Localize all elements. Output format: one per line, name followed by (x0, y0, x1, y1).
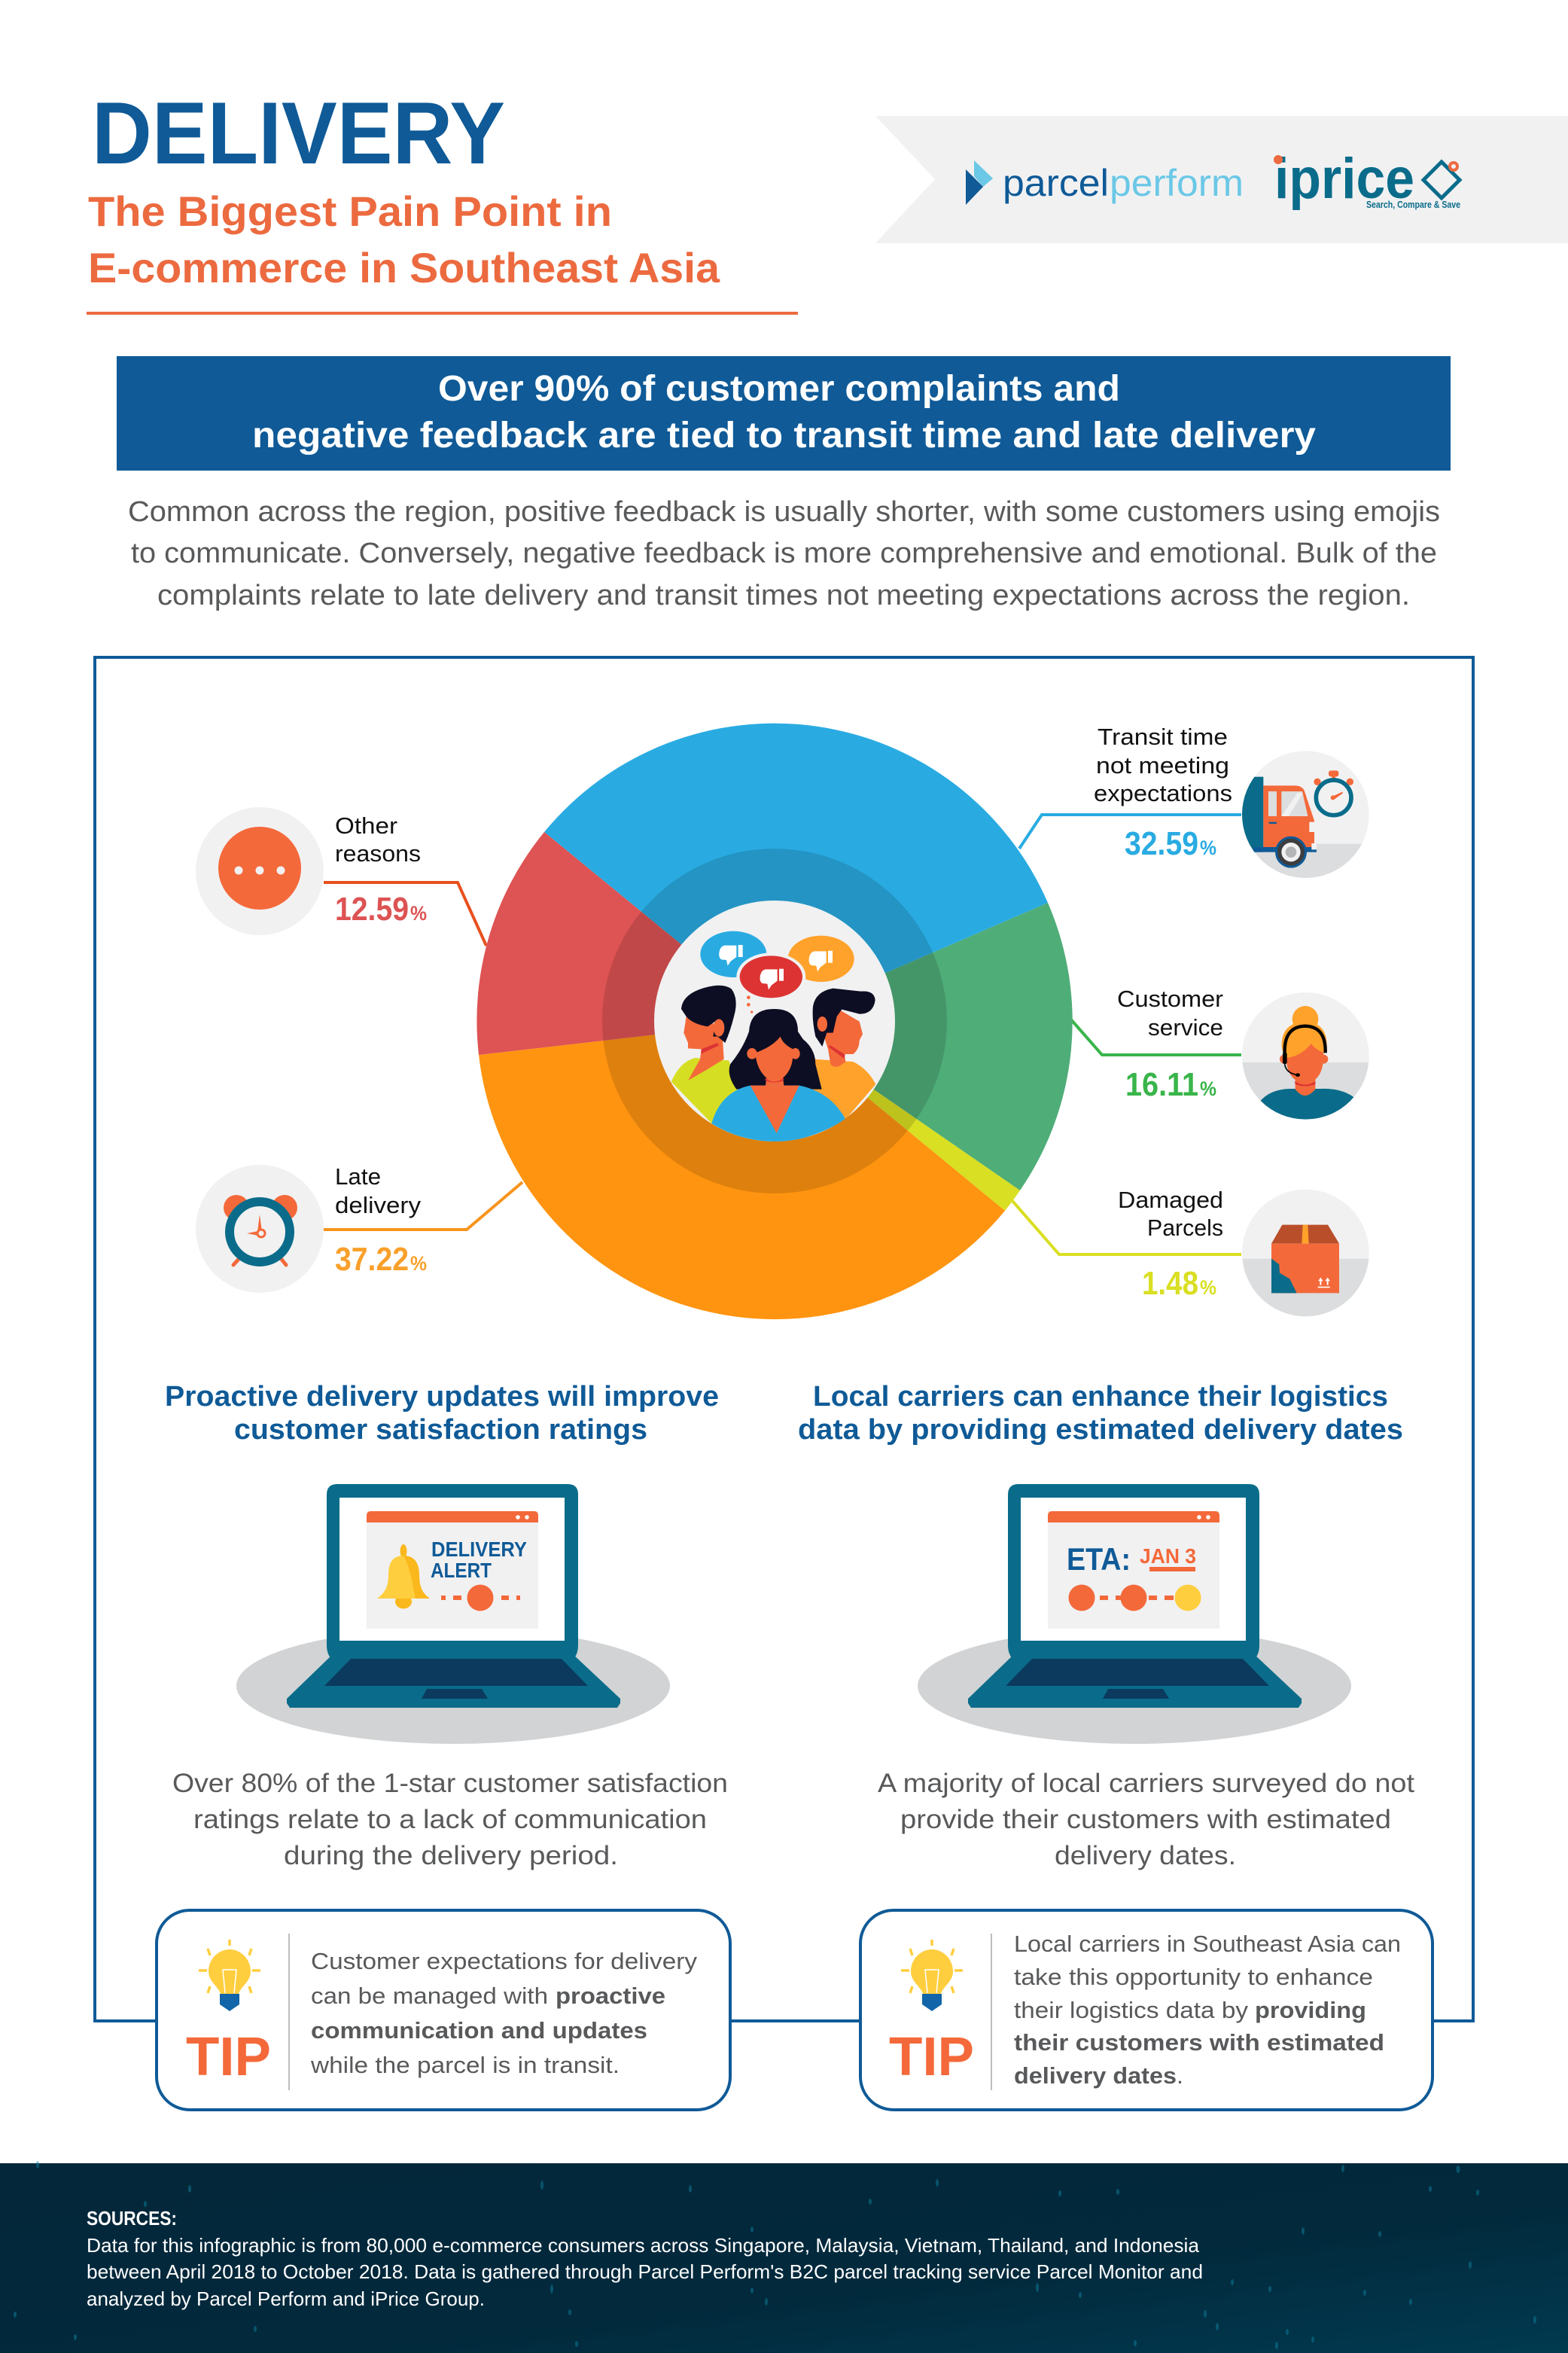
sources text: Data for this infographic is from 80,000 e-commerce consumers across Singapore, Malaysia, Vietnam, Thailand, and Indonesia (87, 2234, 1200, 2257)
laptop: ETA: ETA: (1067, 1541, 1131, 1577)
tip text: communication and updates (311, 2017, 647, 2044)
logo: iprice: Search, Compare & Save (1366, 199, 1460, 210)
tip text (310, 1948, 698, 2078)
left body text (172, 1769, 728, 1870)
logo: iprice: iprice (1274, 147, 1414, 211)
laptop: ETA: JAN 3 (1140, 1544, 1196, 1568)
tip panel left: TIP (186, 2027, 271, 2087)
subtitle line 1: The Biggest Pain Point in (88, 187, 612, 235)
tip panel left (157, 1910, 730, 2110)
callout: late delivery: delivery (335, 1192, 422, 1218)
callout: customer service: service (1148, 1014, 1223, 1041)
callout: customer service (1119, 991, 1369, 1120)
right column heading: Local carriers can enhance their logistics (813, 1381, 1388, 1413)
left column heading: Proactive delivery updates will improve (165, 1381, 719, 1413)
right body text (878, 1769, 1414, 1870)
right person (813, 989, 875, 1120)
center person (711, 1009, 845, 1142)
tip text: providing (1255, 1997, 1366, 2023)
icon: damaged box (1242, 1190, 1369, 1316)
browser window (367, 1511, 538, 1629)
icon: unhappy customers (671, 931, 875, 1142)
icon: light bulb (901, 1940, 963, 2011)
callout: transit time (1095, 728, 1369, 878)
callout: late delivery: % (410, 1252, 427, 1275)
headline banner: Over 90% of customer complaints and (438, 369, 1120, 409)
tip panel right (860, 1910, 1433, 2110)
tip text: Customer expectations for delivery (311, 1948, 698, 1974)
callout: other reasons: 12.59 (335, 891, 409, 928)
callout connector lines (324, 815, 1241, 1254)
headline banner: negative feedback are tied to transit time and late delivery (252, 416, 1316, 456)
intro paragraph (128, 496, 1440, 611)
sources text: analyzed by Parcel Perform and iPrice Group. (87, 2287, 485, 2310)
laptop: ETA (918, 1484, 1351, 1744)
callout: transit time: Transit time (1098, 724, 1228, 750)
slice: transit time (544, 724, 1048, 1021)
right body text: A majority of local carriers surveyed do not (878, 1769, 1414, 1798)
footer (0, 2161, 1568, 2353)
tip text: can be managed with (311, 1983, 548, 2009)
callout: late delivery (196, 1163, 427, 1293)
slice: other reasons (476, 832, 775, 1055)
icon: parcelperform arrow (966, 160, 993, 205)
tip text: take this opportunity to enhance (1014, 1964, 1373, 1990)
left body text: ratings relate to a lack of communication (193, 1805, 707, 1834)
icon: light bulb (199, 1940, 260, 2011)
right column heading: data by providing estimated delivery dates (798, 1414, 1403, 1446)
icon: alarm clock (224, 1195, 297, 1265)
callout: transit time: 32.59 (1125, 825, 1198, 862)
callout: customer service: 16.11 (1125, 1066, 1198, 1103)
callout: transit time: not meeting (1096, 752, 1229, 779)
callout: customer service: % (1200, 1077, 1216, 1100)
callout: other reasons (196, 807, 427, 935)
title underline (87, 312, 798, 315)
progress indicator (1069, 1584, 1201, 1611)
icon: support agent (1242, 992, 1369, 1120)
left person (671, 986, 738, 1124)
tip text: Local carriers in Southeast Asia can (1014, 1931, 1401, 1957)
callout: late delivery: 37.22 (335, 1241, 409, 1278)
left body text: during the delivery period. (284, 1841, 618, 1870)
sources text: between April 2018 to October 2018. Data is gathered through Parcel Perform's B2C parcel tracking service Parcel Monitor and (87, 2260, 1203, 2283)
icon: bell (377, 1544, 430, 1608)
tip text: their logistics data by (1014, 1997, 1249, 2023)
tip text: proactive (556, 1983, 665, 2009)
logo: parcelperform: parcel (1003, 162, 1109, 204)
slice: damaged parcels (775, 1021, 1020, 1211)
right body text: provide their customers with estimated (900, 1805, 1391, 1834)
laptop: delivery alert: DELIVERY (431, 1538, 527, 1561)
donut chart (476, 724, 1073, 1319)
callout: damaged parcels (1120, 1190, 1369, 1316)
slice: customer service (775, 903, 1073, 1190)
right column heading (798, 1381, 1403, 1446)
logo: parcelperform (1003, 162, 1244, 204)
browser window (1048, 1511, 1219, 1629)
icon: speech dots (218, 827, 301, 910)
icon: truck and stopwatch (1242, 751, 1369, 878)
callout: transit time: expectations (1094, 780, 1232, 806)
slice: late delivery (479, 1021, 1005, 1319)
callout: damaged parcels: Damaged (1118, 1187, 1223, 1213)
logo: parcelperform: perform (1110, 162, 1244, 204)
callout: damaged parcels: 1.48 (1142, 1265, 1198, 1302)
callout: transit time: % (1200, 837, 1216, 859)
callout: other reasons: Other (335, 812, 397, 839)
content frame (95, 657, 1473, 2021)
progress indicator (441, 1584, 520, 1611)
tip text: their customers with estimated (1014, 2029, 1384, 2056)
tip panel right: TIP (889, 2027, 974, 2087)
callout: damaged parcels: Parcels (1147, 1215, 1223, 1241)
laptop: delivery alert: ALERT (431, 1559, 492, 1582)
subtitle line 2: E-commerce in Southeast Asia (88, 244, 720, 291)
sources text: SOURCES: (87, 2207, 177, 2230)
callout: other reasons: reasons (335, 840, 421, 867)
sources text (87, 2207, 1203, 2310)
callout: damaged parcels: % (1200, 1276, 1216, 1299)
left column heading: customer satisfaction ratings (234, 1414, 647, 1446)
title block (87, 84, 798, 315)
callout: other reasons: % (410, 902, 427, 925)
logo ribbon (875, 116, 1568, 243)
callout: customer service: Customer (1117, 986, 1223, 1012)
tip text (1014, 1931, 1401, 2089)
intro paragraph: Common across the region, positive feedback is usually shorter, with some customers using emojis (128, 496, 1440, 528)
left body text: Over 80% of the 1-star customer satisfaction (172, 1769, 728, 1798)
headline banner (117, 356, 1451, 471)
intro paragraph: complaints relate to late delivery and transit times not meeting expectations across the region. (157, 580, 1410, 611)
main title: DELIVERY (92, 84, 505, 182)
callout: late delivery: Late (335, 1163, 381, 1190)
speech bubbles (700, 931, 854, 1013)
laptop: delivery alert (236, 1484, 670, 1744)
left column heading (165, 1381, 719, 1446)
right body text: delivery dates. (1055, 1841, 1236, 1870)
tip text: while the parcel is in transit. (310, 2052, 620, 2078)
tip text: delivery dates . (1014, 2062, 1183, 2089)
intro paragraph: to communicate. Conversely, negative feedback is more comprehensive and emotional. Bulk of the (131, 538, 1437, 569)
